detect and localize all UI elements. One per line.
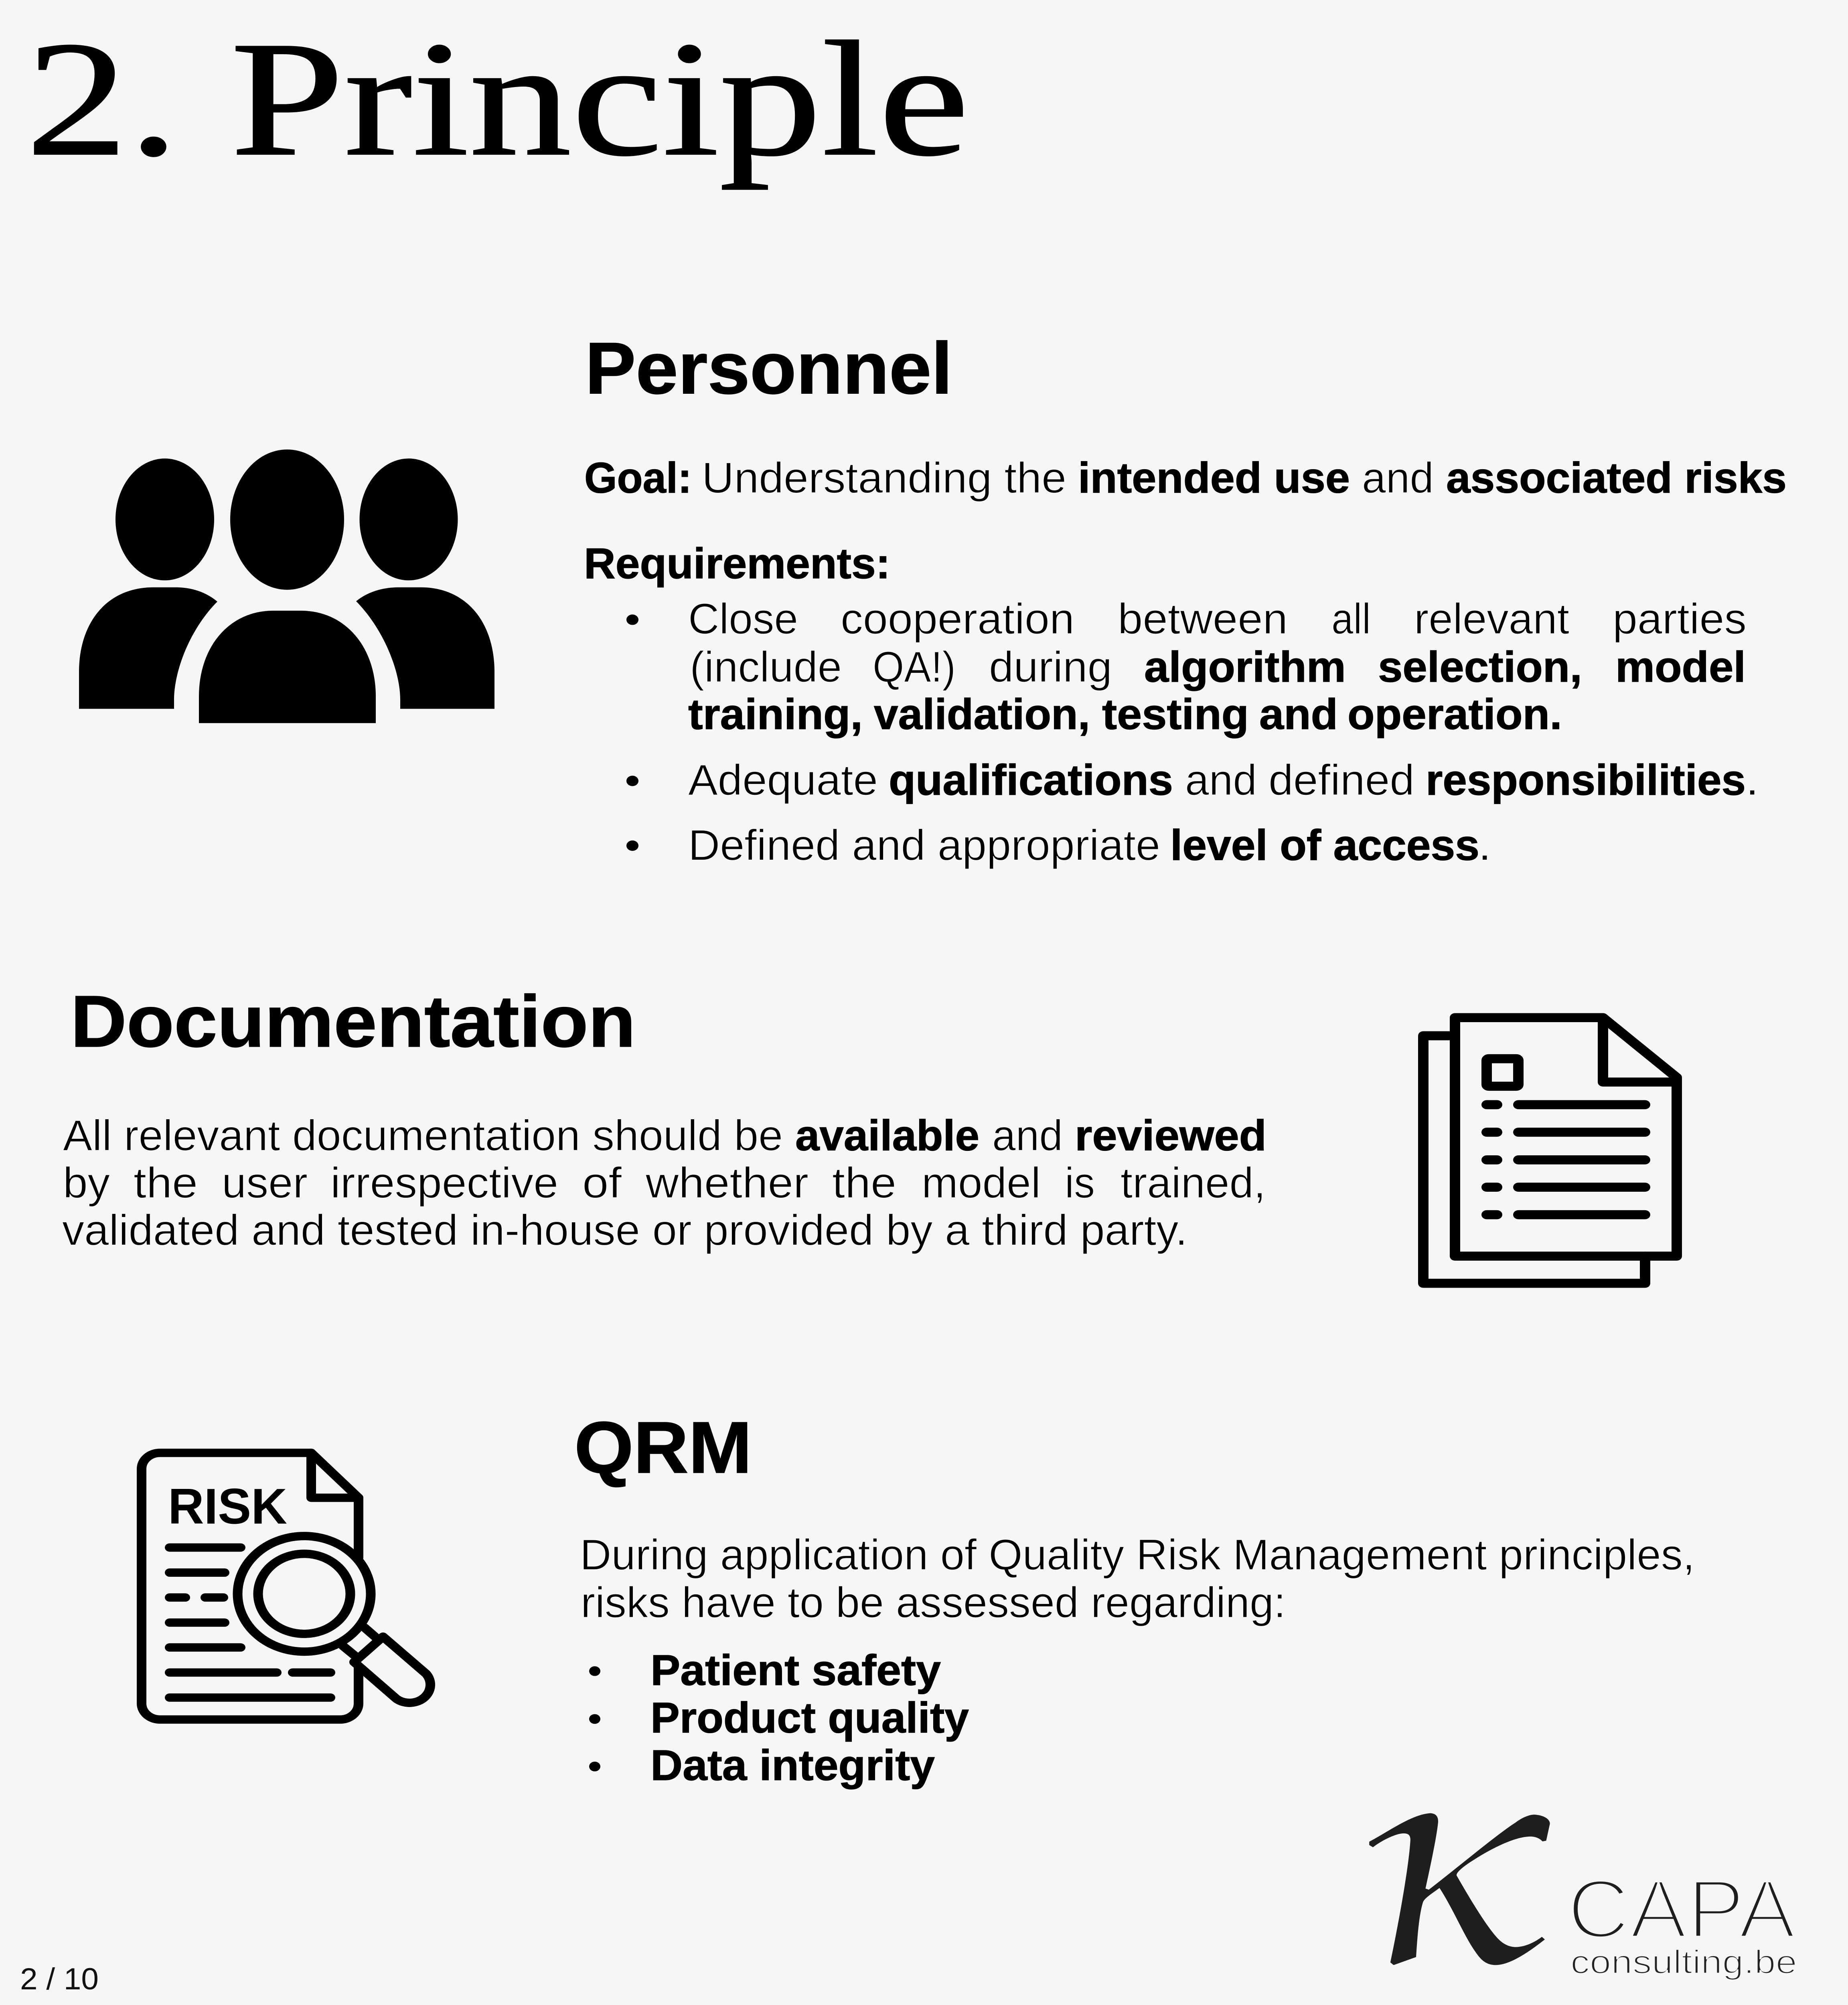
- logo text: consulting.be: consulting.be: [1570, 1943, 1797, 1981]
- list: risk areas: Patient safety: [650, 1646, 941, 1694]
- text: documentation paragraph: and: [992, 1111, 1063, 1160]
- list: risk areas: Data integrity: [650, 1741, 935, 1789]
- bullet: cooperation: cooperation: [841, 595, 1074, 643]
- bullet: cooperation: operation.: [1348, 690, 1562, 738]
- title: 2. Principle: [26, 7, 969, 190]
- text: requirements label: Requirements:: [584, 539, 890, 587]
- heading: QRM: QRM: [574, 1406, 752, 1488]
- text: QRM paragraph: risks have to be assessed regarding:: [581, 1578, 1286, 1626]
- text: QRM paragraph: During application of Quality Risk Management principles,: [580, 1531, 1695, 1579]
- bullet: cooperation: and: [1259, 690, 1338, 738]
- bullet: cooperation: validation,: [874, 690, 1090, 738]
- bullet: cooperation: during: [989, 643, 1112, 691]
- text: documentation paragraph: irrespective: [330, 1158, 558, 1207]
- bullet: qualifications: defined: [1268, 756, 1414, 804]
- list: risk areas: Product quality: [650, 1693, 969, 1742]
- text: goal line: associated risks: [1446, 454, 1787, 502]
- text: goal line: intended use: [1078, 454, 1350, 502]
- bullet: qualifications: .: [1745, 756, 1759, 804]
- bullet: qualifications: responsibilities: [1426, 756, 1746, 804]
- text: goal line: Goal:: [584, 454, 692, 502]
- bullet: cooperation: selection,: [1378, 643, 1582, 691]
- text: documentation paragraph: the: [832, 1158, 896, 1207]
- bullet: level of access: level of access: [1170, 821, 1479, 869]
- bullet: qualifications: and: [1185, 756, 1257, 804]
- text: documentation paragraph: trained,: [1121, 1158, 1266, 1207]
- panel: QRM: [142, 1406, 1695, 1789]
- bullet: cooperation: parties: [1613, 595, 1747, 643]
- bullet: cooperation: all: [1331, 595, 1371, 643]
- text: documentation paragraph: whether: [645, 1158, 808, 1207]
- panel: personnel: [79, 327, 1787, 869]
- page number: 2 / 10: [20, 1962, 99, 1996]
- bullet: cooperation: relevant: [1414, 595, 1569, 643]
- bullet: cooperation: between: [1118, 595, 1288, 643]
- panel: documentation: [62, 980, 1677, 1283]
- bullet: qualifications: [626, 756, 1759, 804]
- logo: K CAPA consulting.be: [1369, 1813, 1797, 1981]
- text: documentation paragraph: All relevant documentation should be: [63, 1111, 783, 1160]
- text: goal line: [584, 454, 1787, 502]
- bullet: level of access: Defined and appropriate: [688, 821, 1160, 869]
- text: documentation paragraph: available: [795, 1111, 979, 1160]
- bullet: cooperation: [626, 595, 1747, 738]
- text: documentation paragraph: validated and tested in-house or provided by a third party.: [62, 1206, 1187, 1254]
- bullet: cooperation: Close: [688, 595, 798, 643]
- bullet: cooperation: training,: [688, 690, 863, 738]
- logo mark: K: [1369, 1813, 1550, 1965]
- icon: risk document with magnifier: [142, 1453, 430, 1719]
- text: documentation paragraph: user: [222, 1158, 308, 1207]
- icon: group of people: [79, 450, 494, 723]
- text: documentation paragraph: reviewed: [1075, 1111, 1266, 1160]
- bullet: cooperation: QA!): [873, 643, 956, 691]
- text: documentation paragraph: is: [1065, 1158, 1095, 1207]
- icon label: RISK: RISK: [168, 1478, 287, 1534]
- text: documentation paragraph: model: [922, 1158, 1041, 1207]
- text: documentation paragraph: by: [63, 1158, 110, 1207]
- icon: documents: [1423, 1018, 1677, 1283]
- bullet: cooperation: testing: [1102, 690, 1249, 738]
- list: risk areas: [589, 1646, 969, 1789]
- bullet: qualifications: qualifications: [889, 756, 1173, 804]
- bullet: cooperation: algorithm: [1144, 643, 1346, 691]
- text: documentation paragraph: [62, 1111, 1266, 1254]
- text: documentation paragraph: the: [134, 1158, 198, 1207]
- text: goal line: and: [1362, 454, 1434, 502]
- heading: Personnel: Personnel: [585, 327, 952, 409]
- bullet: cooperation: model: [1615, 643, 1746, 691]
- text: documentation paragraph: of: [582, 1158, 622, 1207]
- logo text: CAPA: CAPA: [1567, 1862, 1796, 1956]
- bullet: level of access: [626, 821, 1491, 869]
- bullet: qualifications: Adequate: [688, 756, 878, 804]
- heading: Documentation: Documentation: [71, 980, 636, 1062]
- text: QRM paragraph: [580, 1531, 1695, 1626]
- bullet: cooperation: (include: [690, 643, 842, 691]
- text: goal line: Understanding the: [702, 454, 1066, 502]
- bullet: level of access: .: [1478, 821, 1491, 869]
